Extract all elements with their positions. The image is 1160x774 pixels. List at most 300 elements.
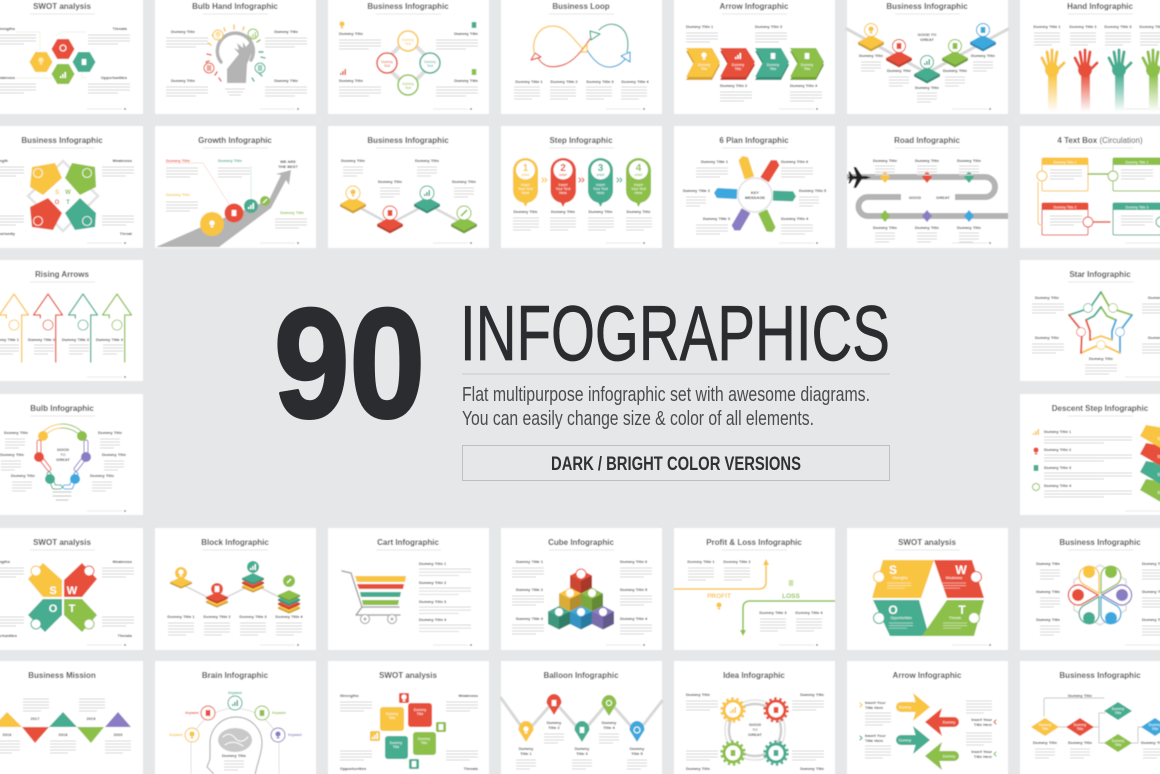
- diagram: diamond flowchart: Title: [1115, 743, 1121, 747]
- labels and text: [516, 720, 647, 769]
- diagram: four chevrons: Dummy: [767, 63, 779, 67]
- labels and text: Dummy Title: [171, 78, 196, 83]
- labels and text: Title 4: [603, 725, 616, 730]
- labels and text: [340, 693, 479, 771]
- heading: Arrow Infographic: [720, 2, 789, 11]
- panel: Bulb Infographic: [0, 394, 143, 515]
- diagram: six radial tags: MESSAGE: [745, 195, 765, 200]
- diagram: four parallelograms: Strengths: [892, 576, 908, 580]
- diagram: four parallelograms: Weakness: [946, 576, 963, 580]
- labels and text: [686, 692, 825, 771]
- labels and text: Dummy Title: [943, 68, 968, 73]
- labels and text: [859, 53, 996, 102]
- diagram: alternating triangles timeline: 2017: [31, 716, 40, 721]
- labels and text: Dummy Title: [971, 53, 996, 58]
- labels and text: [166, 158, 307, 228]
- big number 90: 90: [274, 277, 425, 451]
- labels and text: [166, 29, 307, 96]
- diagram: four chevrons: Dummy: [698, 63, 710, 67]
- panel: Brain Infographic: [155, 661, 316, 774]
- labels and text: Opportunities: [340, 766, 367, 771]
- diagram: bulb ribbon with circles: GREAT: [56, 457, 70, 462]
- description text: You can easily change size & color of all elements.: [462, 408, 814, 430]
- labels and text: Dummy Title: [280, 210, 305, 215]
- panel: Growth Infographic: [155, 126, 316, 248]
- diagram: diamond flowchart: Title: [1115, 711, 1121, 715]
- labels and text: Dummy Title: [102, 452, 127, 457]
- labels and text: Title 2: [548, 725, 561, 730]
- diagram: alternating triangles timeline: 2016: [3, 732, 12, 737]
- panel: Business Infographic flowchart: [1020, 661, 1160, 774]
- labels and text: Dummy Title 2: [516, 587, 544, 592]
- panel: Descent Step Infographic: [1020, 394, 1160, 515]
- labels and text: Dummy Title 1: [1044, 429, 1072, 434]
- diagram: four step capsules: Here: [522, 191, 529, 195]
- diagram: four parallelograms: O: [888, 603, 898, 617]
- labels and text: Dummy Title: [957, 225, 982, 230]
- diagram: diamond flowchart: Dummy: [1039, 723, 1051, 727]
- labels and text: [167, 614, 303, 635]
- labels and text: [514, 79, 649, 99]
- diagram: diamond flowchart: Title: [1152, 727, 1158, 731]
- labels and text: Dummy Title: [957, 158, 982, 163]
- versions callout box: [462, 446, 890, 480]
- panel: SWOT analysis parallelograms: [847, 528, 1008, 650]
- labels and text: Dummy Title: [274, 78, 299, 83]
- diagram: four step capsules: Insert: [521, 183, 530, 187]
- diagram: four chevrons: Title: [701, 67, 707, 71]
- diagram: winding road with plane: GREAT: [936, 195, 950, 200]
- labels and text: Dummy Title: [873, 158, 898, 163]
- labels and text: Dummy Title: [11, 473, 36, 478]
- labels and text: Dummy Title: [1089, 356, 1114, 361]
- labels and text: Dummy Title 1: [167, 614, 195, 619]
- labels and text: Dummy Title: [4, 430, 29, 435]
- labels and text: Dummy Title 2: [203, 614, 231, 619]
- diagram: ring with four gears: [722, 698, 788, 764]
- diagram: head, brain and rings: [185, 696, 285, 774]
- diagram: six radial tags: [714, 154, 796, 234]
- labels and text: Dummy Title: [915, 225, 940, 230]
- heading: Cube Infographic: [548, 538, 614, 547]
- labels and text: Keyword: [169, 733, 183, 737]
- diagram: diamond flowchart: Dummy: [1074, 723, 1086, 727]
- diagram: four text boxes in a cycle: Dummy Title 1: [1126, 160, 1148, 164]
- labels and text: Dummy Title 3: [1044, 465, 1072, 470]
- diagram: four pentagons SWOT: [28, 161, 98, 231]
- heading: Business Loop: [552, 2, 610, 11]
- diagram: four rounded squares: Dummy: [414, 708, 426, 712]
- labels and text: Dummy: [602, 720, 617, 725]
- heading: Descent Step Infographic: [1052, 404, 1149, 413]
- diagram: four hexagons: [16, 32, 96, 84]
- labels and text: [419, 561, 471, 631]
- labels and text: Strengths: [340, 693, 359, 698]
- labels and text: Dummy Title: [0, 452, 25, 457]
- labels and text: Title Here: [865, 705, 884, 710]
- labels and text: Dummy Title 4: [419, 617, 447, 622]
- labels and text: Keyword: [288, 733, 302, 737]
- labels and text: Dummy Title: [873, 225, 898, 230]
- heading: Business Infographic: [21, 136, 103, 145]
- diagram: four pill arrows: Dummy: [943, 720, 955, 724]
- diagram: four pill arrows: Dummy: [899, 738, 911, 742]
- diagram: four chevrons: Title: [735, 67, 741, 71]
- diagram: four parallelograms: W: [955, 563, 967, 577]
- labels and text: Dummy Title 3: [239, 614, 267, 619]
- diagram: four step capsules: Insert: [558, 183, 568, 187]
- diagram: four chevrons: [686, 48, 824, 80]
- diagram: four text boxes in a cycle: Dummy Title 2: [1054, 206, 1076, 210]
- diagram: four chevrons: Title: [804, 67, 810, 71]
- diagram: diamond flowchart: Title: [1077, 727, 1083, 731]
- description text: Flat multipurpose infographic set with awesome diagrams.: [462, 384, 870, 406]
- panel: Business Infographic rings: [328, 0, 489, 114]
- diagram: four step capsules: STEP: [635, 173, 642, 177]
- labels and text: Weakness: [458, 693, 479, 698]
- labels and text: [0, 158, 134, 236]
- labels and text: Dummy: [575, 746, 590, 751]
- diagram: four pentagons SWOT: W: [65, 190, 71, 196]
- panel: Bulb Hand Infographic: [155, 0, 316, 114]
- diagram: zigzag platforms: [340, 186, 477, 234]
- diagram: four leaf tags: O: [49, 603, 58, 615]
- diagram: four connected rings: Dummy: [402, 82, 414, 86]
- labels and text: [873, 158, 982, 242]
- labels and text: Dummy Title 3: [419, 599, 447, 604]
- diagram: rising road with balls: WE ARE: [280, 159, 296, 164]
- labels and text: Opportunities: [101, 75, 128, 80]
- diagram: four parallelograms: Threats: [949, 616, 961, 620]
- diagram: zigzag with balloons: [501, 694, 662, 742]
- labels and text: Dummy Title 2: [720, 83, 748, 88]
- labels and text: [865, 700, 993, 759]
- diagram: four rounded squares: Dummy: [386, 712, 398, 716]
- labels and text: Dummy Title: [339, 78, 364, 83]
- labels and text: [0, 559, 134, 638]
- labels and text: Dummy Title: [686, 766, 711, 771]
- diagram: diamond flowchart: Title: [1042, 727, 1048, 731]
- diagram: shopping cart with bars: [342, 571, 406, 624]
- panel: Idea Infographic: [674, 661, 835, 774]
- heading: Business Mission: [28, 671, 96, 680]
- labels and text: Insert Your: [865, 733, 886, 738]
- panel: Road Infographic: [847, 126, 1008, 248]
- labels and text: [0, 430, 127, 491]
- heading: Business Infographic: [367, 2, 449, 11]
- labels and text: Dummy Title 1: [1033, 24, 1061, 29]
- heading: Brain Infographic: [202, 671, 269, 680]
- diagram: four chevrons: Title: [770, 67, 776, 71]
- heading: Idea Infographic: [723, 671, 785, 680]
- labels and text: Dummy Title 4: [621, 79, 649, 84]
- heading: Profit & Loss Infographic: [706, 538, 802, 547]
- labels and text: Dummy Title 4: [795, 610, 823, 615]
- labels and text: Keyword: [272, 711, 286, 715]
- diagram: four rounded squares: Title: [421, 741, 427, 745]
- labels and text: Dummy Title: [90, 473, 115, 478]
- diagram: four step capsules: Your Text: [631, 187, 646, 191]
- labels and text: Dummy Title 4: [275, 614, 303, 619]
- labels and text: Dummy Title 1: [687, 559, 715, 564]
- diagram: rising road with balls: THE BEST: [278, 164, 298, 169]
- labels and text: [1044, 429, 1132, 497]
- labels and text: Dummy Title 3: [516, 616, 544, 621]
- diagram: four pill arrows: Dummy: [899, 706, 911, 710]
- labels and text: Dummy Title: [1033, 740, 1058, 745]
- labels and text: [169, 691, 302, 770]
- diagram: four connected rings: Text: [427, 64, 433, 68]
- labels and text: Title 3: [576, 751, 589, 756]
- labels and text: Dummy Title: [589, 209, 613, 214]
- text blocks: [0, 699, 131, 753]
- panel: Profit & Loss Infographic: [674, 528, 835, 650]
- diagram: four step capsules: Insert: [634, 183, 643, 187]
- panel: Business Infographic pentagons: [0, 126, 143, 248]
- diagram: profit and loss paths: [674, 559, 835, 636]
- diagram: pyramid of cubes: [548, 569, 614, 630]
- diagram: winding road with plane: [847, 167, 1008, 222]
- labels and text: Dummy Title: [1035, 335, 1060, 340]
- panel: SWOT analysis rounded squares: [328, 661, 489, 774]
- heading: Business Infographic: [1059, 671, 1141, 680]
- diagram: ring with four gears: GREAT: [748, 732, 762, 737]
- labels and text: [686, 24, 822, 101]
- diagram: four step capsules: 4: [636, 163, 642, 174]
- labels and text: Dummy Title: [800, 766, 825, 771]
- panel: 6 Plan Infographic: [674, 126, 835, 248]
- heading: Balloon Infographic: [543, 671, 619, 680]
- labels and text: [0, 26, 130, 93]
- central headline block: [274, 277, 890, 480]
- labels and text: [687, 559, 823, 631]
- diagram: four text boxes in a cycle: [1037, 158, 1160, 235]
- labels and text: Dummy Title: [98, 430, 123, 435]
- labels and text: Dummy Title: [859, 53, 884, 58]
- labels and text: Dummy Title: [454, 78, 479, 83]
- diagram: four step capsules: Here: [635, 191, 642, 195]
- diagram: four parallelograms: [872, 560, 984, 636]
- diagram: diamond flowchart: Dummy: [1112, 739, 1124, 743]
- diagram: four pentagons SWOT: T: [66, 200, 70, 206]
- diagram: diamond flowchart: [1031, 698, 1160, 752]
- labels and text: Dummy Title: [274, 29, 299, 34]
- labels and text: Dummy Title 2: [1044, 447, 1072, 452]
- diagram: four leaf tags: T: [69, 603, 76, 615]
- diagram: V shaped platforms: GOOD TO: [918, 32, 936, 37]
- diagram: profit and loss paths: LOSS: [782, 593, 801, 600]
- diagram: four step capsules: 2: [560, 163, 566, 174]
- diagram: four step capsules: 3: [598, 163, 604, 174]
- panel: Star Infographic: [1020, 260, 1160, 381]
- heading: Arrow Infographic: [893, 671, 962, 680]
- diagram: double star ribbon: [1069, 292, 1132, 353]
- labels and text: Dummy Title 5: [620, 587, 648, 592]
- labels and text: [512, 559, 652, 634]
- panel: Business Infographic petals: [1020, 528, 1160, 650]
- panel: Step Infographic: [501, 126, 662, 248]
- labels and text: Dummy Title 2: [550, 79, 578, 84]
- labels and text: Dummy Title 2: [419, 580, 447, 585]
- diagram: four rounded squares: Title: [389, 716, 395, 720]
- diagram: alternating triangles timeline: [0, 712, 131, 743]
- labels and text: Dummy Title: [341, 158, 366, 163]
- labels and text: Dummy Title 3: [586, 79, 614, 84]
- labels and text: Dummy Title: [1035, 295, 1060, 300]
- labels and text: Dummy Title 5: [799, 188, 827, 193]
- diagram: four step capsules: Your Text: [518, 187, 533, 191]
- labels and text: Dummy Title 3: [62, 337, 90, 342]
- diagram: four text boxes in a cycle: Dummy Title 1: [1054, 160, 1076, 164]
- diagram: four step capsules: STEP: [597, 173, 604, 177]
- labels and text: Dummy Title: [915, 158, 940, 163]
- labels and text: Dummy Title 4: [781, 216, 809, 221]
- diagram: six radial tags: KEY: [751, 190, 759, 195]
- labels and text: Dummy Title 2: [28, 337, 56, 342]
- diagram: four connected rings: [339, 21, 476, 95]
- diagram: four raised hands: [1042, 50, 1160, 112]
- labels and text: Dummy: [519, 746, 534, 751]
- diagram: four rounded squares: Title: [417, 712, 423, 716]
- labels and text: Dummy Title 1: [686, 24, 714, 29]
- diagram: infinity loop with arrows: [531, 24, 630, 67]
- diagram: four parallelograms: Opportunities: [890, 616, 912, 620]
- labels and text: Insert Your: [971, 717, 992, 722]
- diagram: four chevrons: Dummy: [801, 63, 813, 67]
- heading: Bulb Infographic: [30, 404, 94, 413]
- labels and text: Dummy Title 1: [515, 79, 543, 84]
- diagram: ring with four gears: GOOD: [749, 722, 761, 727]
- labels and text: [1036, 561, 1160, 635]
- heading: Rising Arrows: [35, 270, 90, 279]
- labels and text: Keyword: [185, 711, 199, 715]
- labels and text: Dummy Title: [800, 692, 825, 697]
- panel: SWOT analysis hexagons: [0, 0, 143, 114]
- panel: Balloon Infographic: [501, 661, 662, 774]
- labels and text: [1033, 693, 1160, 758]
- labels and text: Insert Your: [971, 749, 992, 754]
- labels and text: [1032, 295, 1160, 374]
- diagram: four leaf tags: S: [49, 585, 57, 597]
- labels and text: [339, 31, 479, 96]
- labels and text: Dummy Title: [454, 31, 479, 36]
- panel: 4 Text Box Circulation: [1020, 126, 1160, 248]
- labels and text: Dummy Title: [1036, 561, 1061, 566]
- diagram: four connected rings: Dummy: [381, 60, 393, 64]
- labels and text: Dummy Title: [166, 158, 191, 163]
- diagram: alternating triangles timeline: 2018: [59, 732, 68, 737]
- diagram: four pill arrows: [860, 693, 996, 770]
- diagram: winding road with plane: GOOD: [909, 195, 921, 200]
- diagram: four chevrons: Dummy: [732, 63, 744, 67]
- labels and text: Dummy Title: [686, 692, 711, 697]
- diagram: four step capsules: STEP: [522, 173, 529, 177]
- labels and text: Dummy Title 6: [781, 159, 809, 164]
- labels and text: Dummy Title: [415, 158, 440, 163]
- labels and text: Title 1: [520, 751, 533, 756]
- heading: Star Infographic: [1069, 270, 1131, 279]
- diagram: four connected rings: Dummy: [402, 38, 414, 42]
- labels and text: Dummy Title 3: [703, 216, 731, 221]
- panel: Block Infographic: [155, 528, 316, 650]
- divider rule: [462, 374, 890, 375]
- diagram: four step capsules: Here: [597, 191, 604, 195]
- labels and text: Dummy Title: [887, 68, 912, 73]
- diagram: four rounded squares: Dummy: [390, 741, 402, 745]
- heading: Bulb Hand Infographic: [192, 2, 278, 11]
- diagram: four step capsules: Your Text: [593, 187, 608, 191]
- labels and text: Threats: [118, 633, 133, 638]
- diagram: four connected rings: Dummy: [424, 60, 436, 64]
- labels and text: [0, 337, 124, 354]
- diagram: four step capsules: Here: [559, 191, 567, 195]
- labels and text: Dummy Title 4: [1044, 483, 1072, 488]
- diagram: four pill arrows: Dummy: [943, 754, 955, 758]
- labels and text: [683, 159, 827, 234]
- labels and text: Threats: [464, 766, 479, 771]
- panel: Business Infographic zigzag platforms: [328, 126, 489, 248]
- diagram: six teardrop petals: [1068, 563, 1132, 627]
- diagram: four step capsules: Insert: [596, 183, 605, 187]
- heading: Step Infographic: [549, 136, 613, 145]
- labels and text: Dummy Title: [378, 179, 403, 184]
- heading: Cart Infographic: [377, 538, 439, 547]
- panel: Business Loop: [501, 0, 662, 114]
- heading: Hand Infographic: [1067, 2, 1133, 11]
- panel: Arrow Infographic chevrons: [674, 0, 835, 114]
- diagram: bulb ribbon with circles: [34, 426, 91, 500]
- panel: Rising Arrows: [0, 260, 143, 381]
- diagram: four parallelograms: T: [958, 603, 966, 617]
- labels and text: Dummy Title: [551, 209, 576, 214]
- diagram: four step capsules: STEP: [559, 173, 567, 177]
- labels and text: Dummy Title: [1068, 740, 1093, 745]
- labels and text: Dummy Title: [171, 29, 196, 34]
- diagram: diamond flowchart: Dummy: [1112, 707, 1124, 711]
- labels and text: Dummy Title 4: [790, 83, 818, 88]
- heading: SWOT analysis: [898, 538, 956, 547]
- labels and text: Threat: [120, 231, 133, 236]
- diagram: ring with four gears: TO: [752, 727, 758, 732]
- labels and text: [513, 209, 652, 230]
- diagram: four leaf tags: W: [67, 585, 78, 597]
- labels and text: Dummy Title: [1036, 617, 1061, 622]
- diagram: four outlined arrows: [0, 294, 132, 362]
- labels and text: Insert Your: [865, 700, 886, 705]
- labels and text: Dummy Title: [452, 179, 477, 184]
- labels and text: Dummy: [630, 746, 645, 751]
- panel: Arrow Infographic pills: [847, 661, 1008, 774]
- diagram: bulb ribbon with circles: TO: [60, 452, 66, 457]
- diagram: four pentagons SWOT: O: [55, 200, 60, 206]
- labels and text: Dummy Title: [1068, 693, 1093, 698]
- diagram: V shaped platforms: GREAT: [920, 37, 934, 42]
- labels and text: Dummy Title 3: [759, 610, 787, 615]
- labels and text: Keyword: [228, 691, 242, 695]
- labels and text: [1033, 24, 1160, 45]
- diagram: four parallelograms: S: [889, 563, 897, 577]
- diagram: four connected rings: Text: [405, 86, 411, 90]
- labels and text: Dummy Title 3: [755, 24, 783, 29]
- versions callout box: DARK / BRIGHT COLOR VERSIONS: [551, 454, 801, 475]
- labels and text: Title 5: [631, 751, 644, 756]
- labels and text: Dummy Title 1: [701, 159, 729, 164]
- heading: Growth Infographic: [198, 136, 272, 145]
- diagram: bulb ribbon with circles: GOOD: [57, 447, 69, 452]
- panel: Hand Infographic: [1020, 0, 1160, 114]
- labels and text: Dummy Title 1: [419, 561, 447, 566]
- labels and text: Dummy Title: [627, 209, 651, 214]
